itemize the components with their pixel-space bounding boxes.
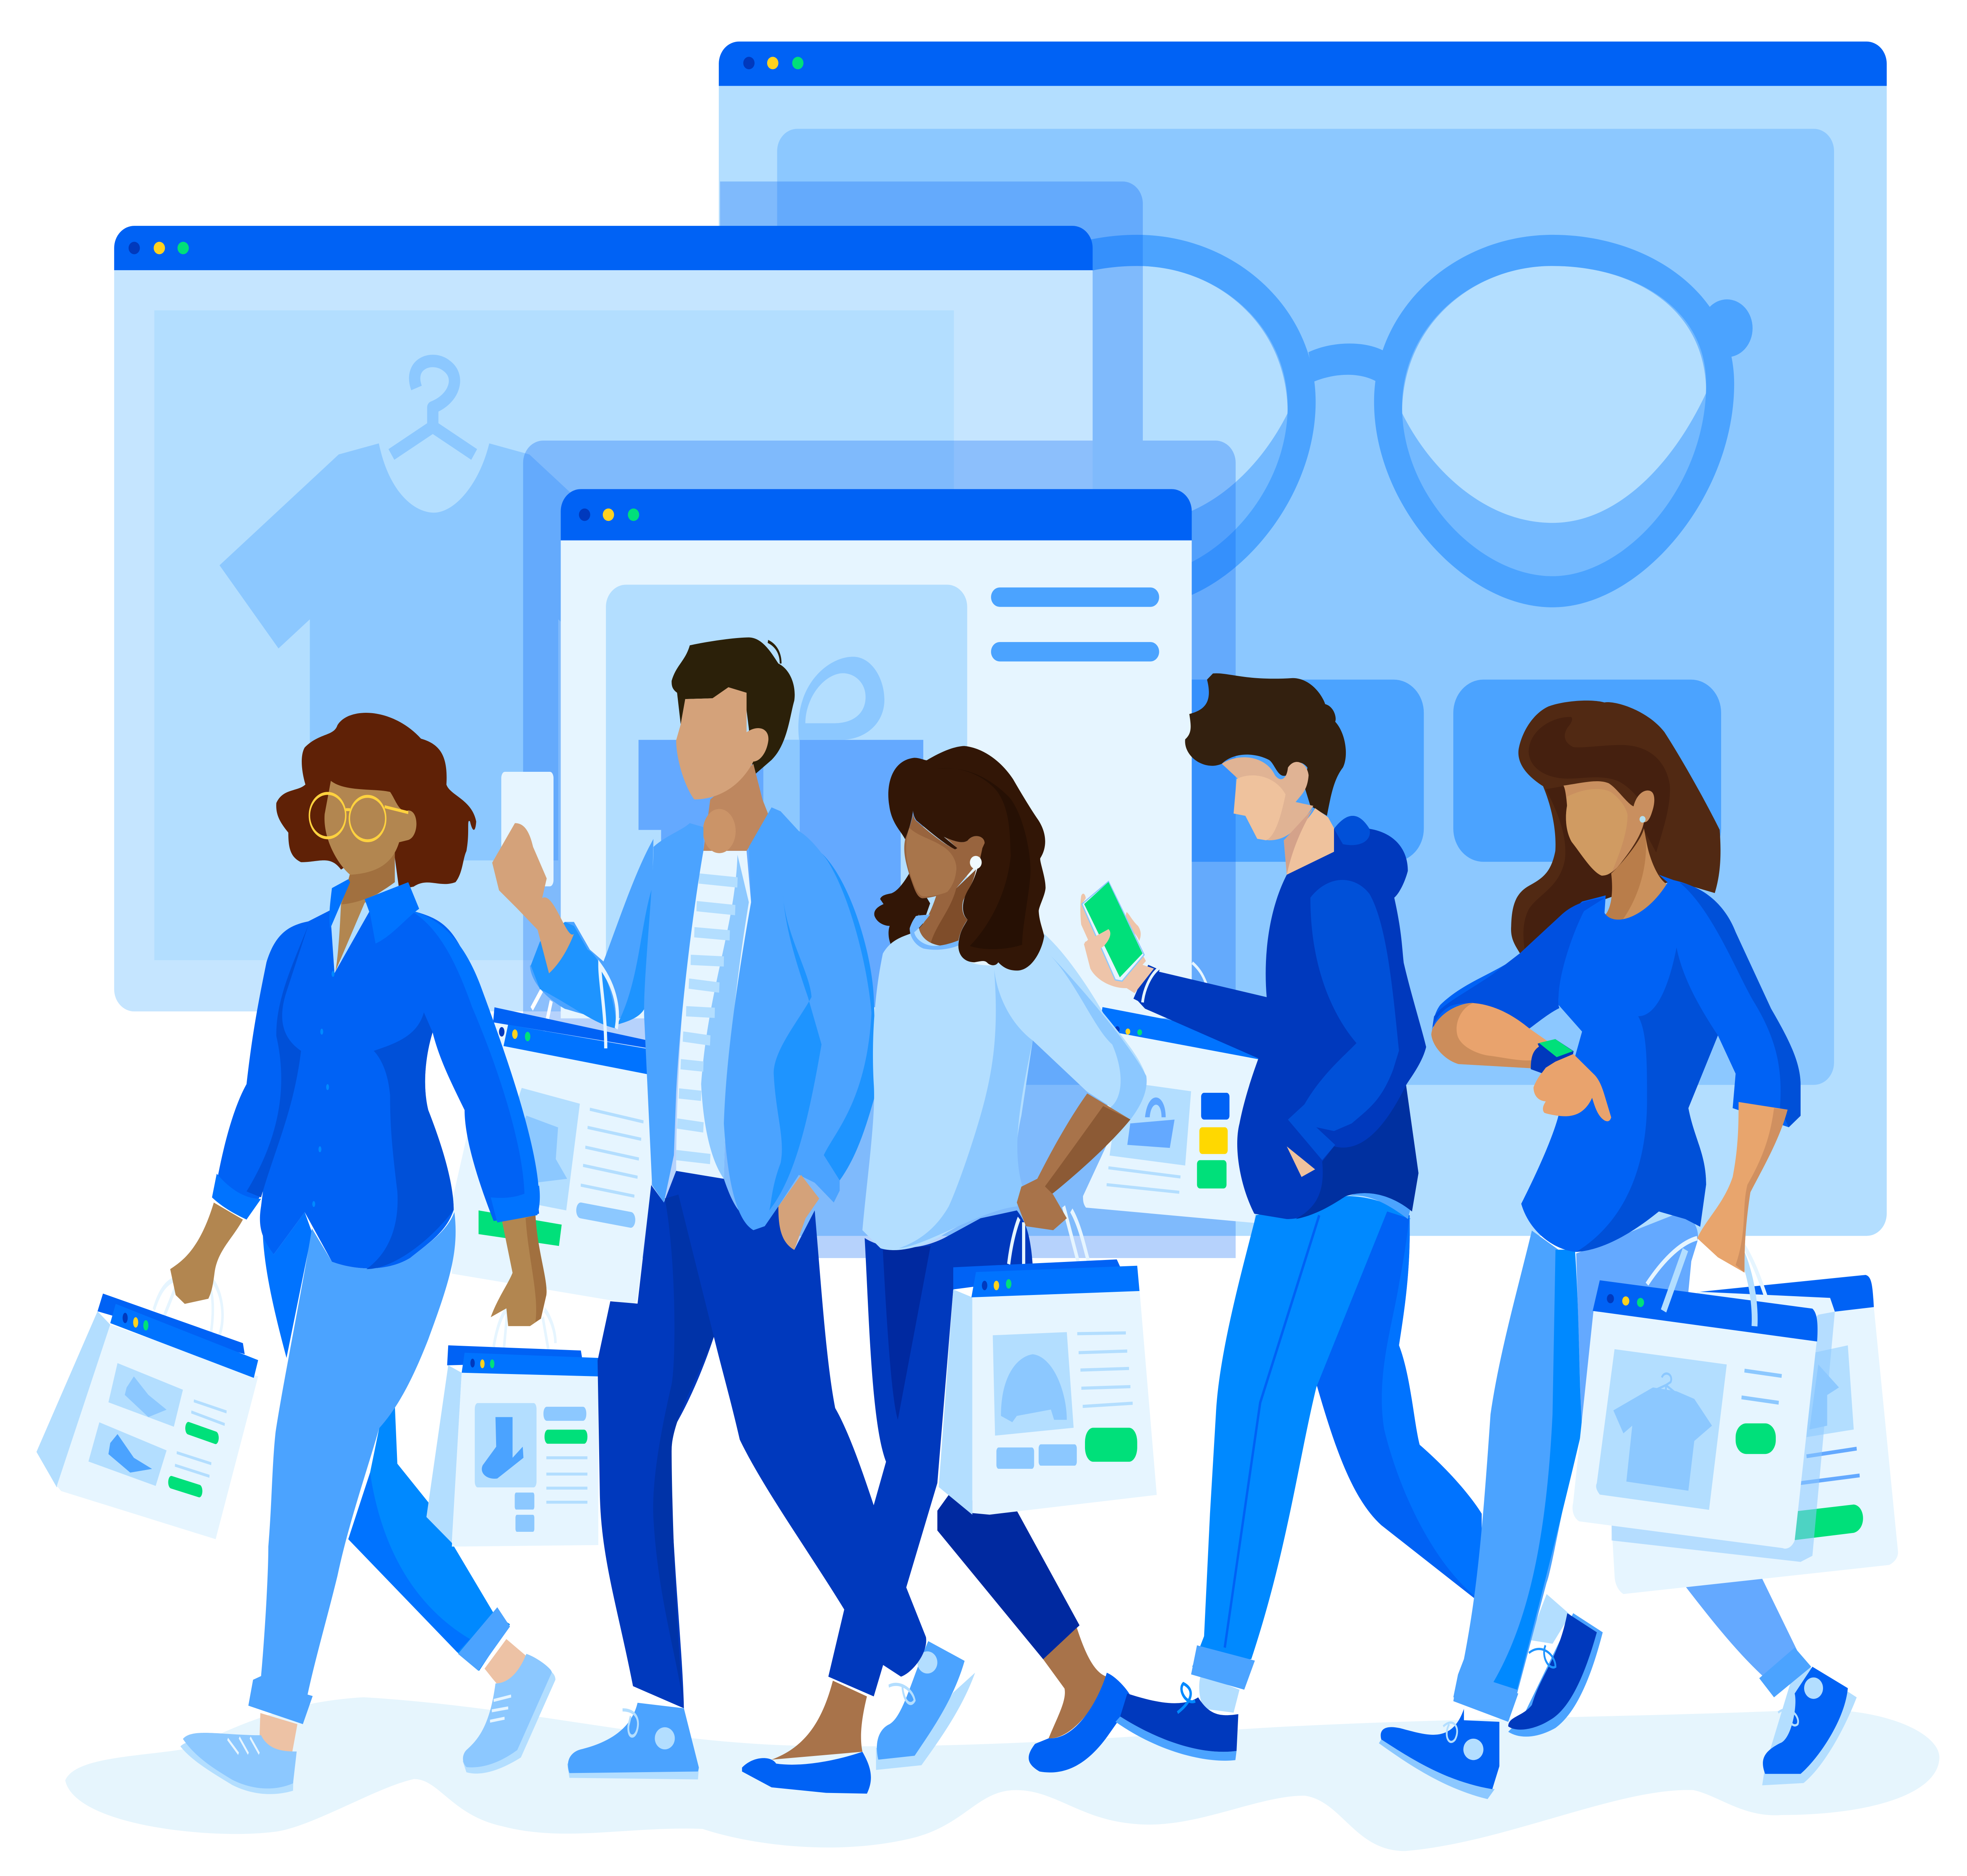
arm and smartwatch bbox=[1431, 898, 1611, 1121]
arm bbox=[1017, 1094, 1130, 1230]
head bbox=[888, 746, 1046, 970]
legs bbox=[598, 1171, 926, 1708]
pocket hand bbox=[779, 1175, 819, 1250]
face highlight bbox=[1234, 775, 1286, 840]
left lace bbox=[623, 1710, 638, 1736]
head and hair bbox=[1511, 701, 1720, 953]
hoodie hem shade bbox=[1295, 1085, 1419, 1219]
shoe: first shopper back foot bbox=[463, 1654, 552, 1767]
face bbox=[676, 687, 768, 799]
smartphone bbox=[501, 772, 554, 886]
blouse shade bbox=[247, 925, 308, 1197]
shopping bag: front bag of fifth shopper bbox=[1572, 1238, 1818, 1549]
pocket hand bbox=[1287, 1146, 1315, 1177]
shopper 4: man in hoodie bbox=[1115, 673, 1482, 1761]
seam bbox=[1225, 1215, 1319, 1647]
jacket left front bbox=[644, 823, 703, 1203]
shopping bag: held by first shopper, left bbox=[37, 1273, 258, 1539]
arms bbox=[170, 1203, 243, 1304]
hand holding third shopper's bag bbox=[1017, 1179, 1067, 1230]
neck bbox=[1284, 808, 1343, 875]
lower body bbox=[742, 1210, 1133, 1794]
cuff bbox=[1191, 1645, 1255, 1690]
striped shirt bbox=[676, 851, 751, 1179]
product tile bbox=[1453, 680, 1721, 862]
neck shade bbox=[1284, 808, 1313, 875]
glasses bbox=[309, 793, 408, 841]
cuffs bbox=[212, 1174, 540, 1223]
shopping bag: behind second shopper bbox=[452, 985, 667, 1304]
icon: gift bbox=[638, 657, 923, 1007]
shopper 1: woman with glasses bbox=[170, 713, 546, 1794]
smartphone screen bbox=[1084, 882, 1142, 978]
neck bbox=[336, 851, 395, 971]
laces bbox=[228, 1738, 259, 1754]
shopper 2: man with striped shirt bbox=[492, 637, 975, 1779]
forearm and hand bbox=[492, 823, 574, 973]
right shoe bbox=[877, 1641, 965, 1760]
shopper 4: hand holding smartphone bbox=[1080, 882, 1160, 1006]
hair bbox=[1185, 673, 1346, 816]
shoes shadow bbox=[567, 1673, 975, 1779]
right lace bbox=[889, 1684, 915, 1704]
text line placeholder bbox=[991, 642, 1159, 661]
face bbox=[325, 781, 417, 875]
shopper 5: back leg bbox=[1576, 1212, 1857, 1786]
thumb bbox=[1085, 929, 1110, 954]
panel: left browser window bbox=[114, 226, 1092, 1011]
bag handles bbox=[600, 965, 617, 1048]
blouse bbox=[214, 910, 539, 1268]
face bbox=[1222, 757, 1313, 840]
right fingers bbox=[1126, 912, 1141, 941]
shopping bag: rear bag of fifth shopper bbox=[1612, 1275, 1898, 1594]
panel: back browser window bbox=[719, 42, 1887, 1236]
shopping bag: behind fourth shopper bbox=[1083, 963, 1269, 1223]
icon: t-shirt on hanger bbox=[220, 361, 649, 860]
text line placeholder bbox=[991, 587, 1159, 607]
left shoe bbox=[568, 1703, 699, 1773]
hair strand and neck bbox=[874, 869, 976, 948]
lower body bbox=[1379, 1230, 1603, 1799]
back leg bbox=[1316, 1208, 1482, 1605]
shoe shadow bbox=[181, 1740, 294, 1794]
shopper 3: woman in light top bbox=[742, 746, 1147, 1794]
shopping bag: held by third shopper bbox=[939, 1206, 1157, 1514]
bag handles bbox=[1664, 1242, 1755, 1326]
ankle bbox=[1199, 1674, 1240, 1713]
hair curl bbox=[768, 641, 781, 664]
shoe top bbox=[183, 1733, 297, 1789]
leg shade bbox=[653, 1195, 714, 1708]
shopping bag: held by first shopper, right bbox=[426, 1310, 598, 1547]
lace bbox=[1177, 1684, 1195, 1713]
buttons bbox=[312, 971, 334, 1207]
jacket shade bbox=[769, 853, 876, 1210]
top bbox=[862, 914, 1147, 1250]
ankle bbox=[259, 1713, 297, 1754]
shopper 5: woman checking smartwatch bbox=[1379, 701, 1801, 1799]
icon: t-shirt bbox=[1613, 1374, 1712, 1491]
top bbox=[1433, 875, 1801, 1252]
hood shade bbox=[1334, 816, 1370, 845]
jacket right front bbox=[724, 807, 876, 1230]
neck bbox=[703, 764, 769, 851]
hair bbox=[276, 713, 476, 889]
blouse shade bbox=[367, 1013, 454, 1269]
smartphone case bbox=[1082, 882, 1144, 981]
right arm bbox=[491, 1215, 546, 1326]
panel: translucent window layer upper bbox=[720, 181, 1143, 441]
hand bbox=[1080, 894, 1154, 993]
product tile bbox=[1161, 680, 1424, 862]
panel: front browser window bbox=[561, 489, 1192, 1018]
hair bbox=[672, 637, 795, 776]
cuff bbox=[1133, 965, 1160, 1006]
sleeve shade bbox=[531, 886, 653, 1029]
shopper 5: right arm and hand bbox=[1697, 1102, 1788, 1273]
icon: eyeglasses bbox=[956, 235, 1753, 607]
neck shadow bbox=[342, 851, 395, 904]
panel: translucent window layer lower bbox=[523, 441, 1236, 1258]
waistband bbox=[1349, 1192, 1411, 1219]
hoodie bbox=[1135, 816, 1426, 1219]
hoodie sleeve bbox=[1288, 880, 1399, 1160]
right arm shade bbox=[526, 1215, 546, 1322]
front leg bbox=[1192, 1196, 1411, 1667]
sleeve bbox=[530, 839, 653, 1018]
front leg bbox=[248, 1212, 456, 1724]
thigh behind bbox=[263, 1212, 312, 1358]
shoe bbox=[1120, 1693, 1238, 1752]
ground shadow bbox=[65, 1697, 1939, 1851]
shopper 1: back leg bbox=[348, 1404, 555, 1774]
shoe shadow bbox=[1115, 1716, 1236, 1761]
sleeve highlight bbox=[410, 910, 539, 1206]
back leg highlight bbox=[1382, 1215, 1482, 1602]
collar bbox=[329, 879, 419, 944]
shirt shade bbox=[701, 855, 749, 1179]
